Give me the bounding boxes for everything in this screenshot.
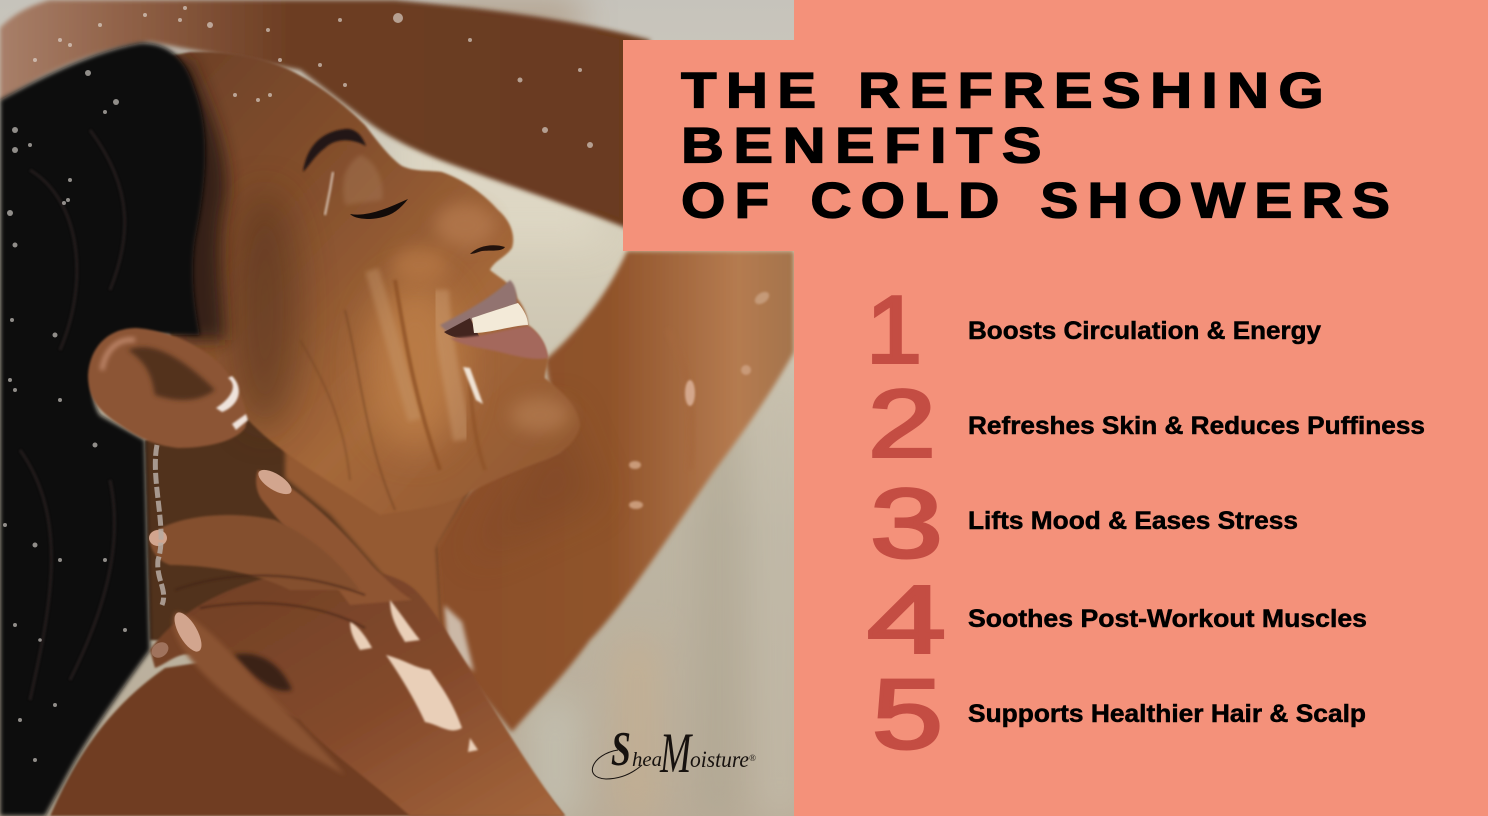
SheaMoisture logo	[592, 722, 756, 785]
benefit 2	[868, 370, 1425, 478]
benefit 4	[867, 566, 1367, 674]
benefit 3	[870, 468, 1298, 578]
hair	[0, 43, 227, 816]
fingernails	[149, 465, 295, 661]
ear	[88, 328, 248, 448]
number 2: 2	[868, 370, 936, 478]
label: skin: Refreshes Skin & Reduces Puffiness	[968, 412, 1425, 440]
benefit 5	[872, 659, 1366, 769]
label: circulation: Boosts Circulation & Energy	[968, 317, 1321, 345]
SheaMoisture logo: oisture	[690, 747, 749, 772]
smile: lips and teeth	[440, 280, 548, 359]
pale skin patches on hand	[350, 600, 478, 752]
number 5: 5	[872, 659, 943, 769]
index finger along the neck	[256, 470, 412, 605]
dripping water from ear	[155, 445, 164, 605]
title: OF COLD SHOWERS	[681, 172, 1399, 228]
bent arm at right	[420, 251, 794, 732]
label: mood: Lifts Mood & Eases Stress	[968, 507, 1298, 535]
raised arm across the top	[0, 0, 650, 234]
temple and forehead shading	[230, 190, 300, 430]
label: hair: Supports Healthier Hair & Scalp	[968, 700, 1366, 728]
pale gap beside neck	[444, 605, 474, 672]
face in profile	[150, 52, 580, 515]
number 3: 3	[870, 468, 943, 578]
eyebrow	[303, 129, 366, 172]
cheek glow	[367, 280, 463, 450]
lit neck front	[285, 440, 470, 632]
SheaMoisture logo: hea	[632, 749, 662, 771]
title: BENEFITS	[681, 118, 1051, 174]
water droplets	[3, 6, 593, 762]
title	[681, 62, 1399, 228]
SheaMoisture logo: M	[659, 722, 693, 785]
teeth	[472, 303, 528, 333]
SheaMoisture logo: ®	[749, 753, 756, 763]
ear water highlights	[216, 376, 239, 412]
number 1: 1	[866, 276, 922, 384]
nose and chin highlights	[392, 203, 570, 433]
middle finger	[150, 515, 360, 590]
knuckle lines	[175, 576, 365, 628]
lower lip	[450, 326, 548, 359]
hand on neck	[149, 465, 565, 816]
label: muscles: Soothes Post-Workout Muscles	[968, 605, 1367, 633]
upper lip	[440, 280, 517, 332]
number 4: 4	[867, 566, 946, 674]
arm soft shading	[470, 289, 771, 560]
thumb	[173, 612, 345, 775]
blurred shower wall background	[0, 0, 800, 816]
SheaMoisture logo: S	[611, 723, 631, 776]
wet skin streaks	[300, 270, 485, 510]
hand back and wrist	[150, 568, 565, 816]
shoulder and chest	[50, 640, 565, 816]
neck	[145, 410, 470, 650]
gap between fingers	[233, 654, 292, 691]
closed eye with lashes	[350, 199, 408, 219]
photo: woman enjoying a cold shower	[0, 0, 794, 816]
water highlights on face	[463, 367, 483, 404]
title: THE REFRESHING	[681, 62, 1333, 118]
mouth opening	[444, 318, 480, 339]
nostril	[470, 245, 505, 254]
benefit 1	[866, 276, 1321, 384]
